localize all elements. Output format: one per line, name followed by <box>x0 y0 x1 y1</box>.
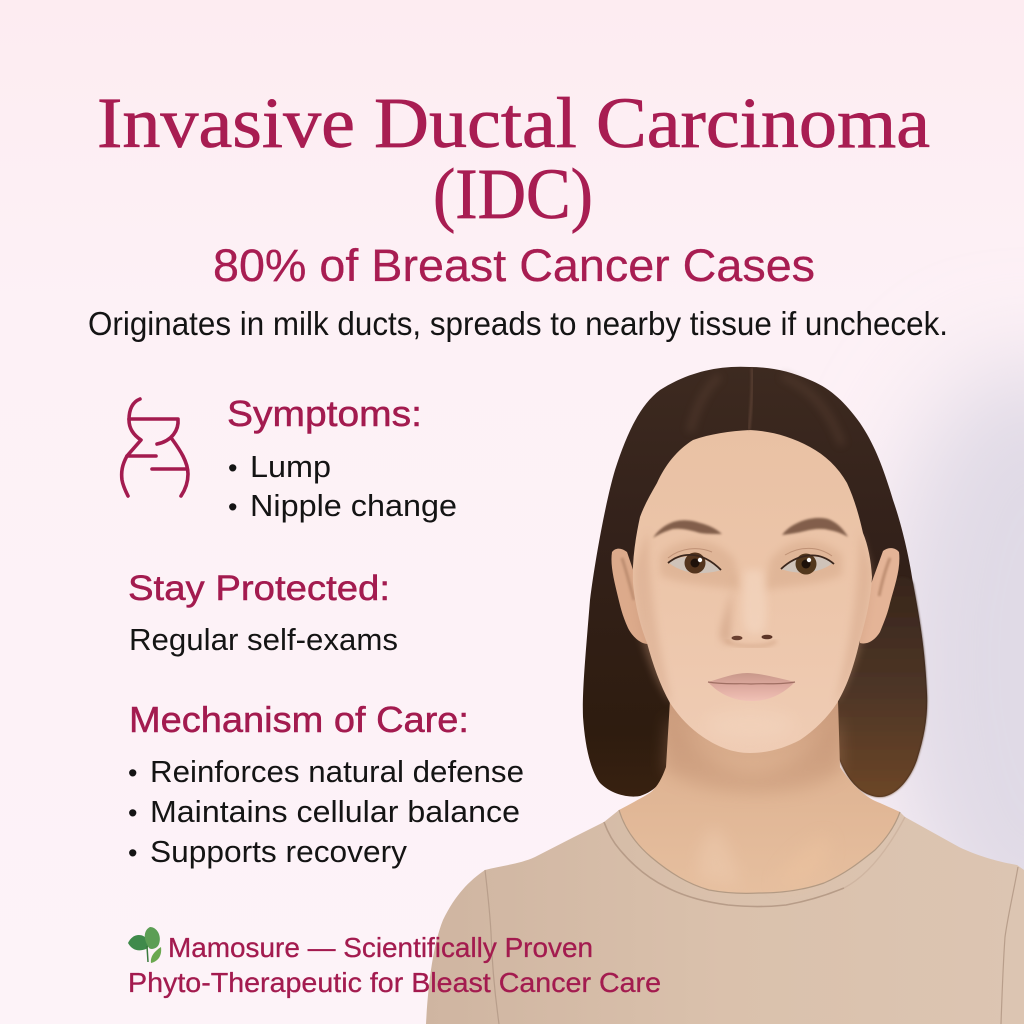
right eye <box>781 548 834 574</box>
eye socket shading <box>660 541 740 590</box>
mechanism of care section <box>128 699 524 869</box>
subtitle: 80% of Breast Cancer Cases <box>213 240 815 291</box>
chin highlight <box>705 709 795 741</box>
shirt collar line <box>604 822 844 906</box>
symptoms list <box>228 449 457 523</box>
footer text <box>128 932 661 998</box>
hair parting <box>749 368 752 430</box>
title: Invasive Ductal Carcinoma <box>97 83 930 163</box>
hair crown sheen <box>690 376 842 445</box>
neck collarbone highlights <box>698 825 740 885</box>
left eye <box>668 549 721 574</box>
symptoms heading: Symptoms: <box>227 393 422 434</box>
mechanism list: Supports recovery <box>150 834 408 869</box>
symptoms section <box>227 393 457 523</box>
description: Originates in milk ducts, spreads to nearby tissue if unchecek. <box>88 305 948 342</box>
footer text: Mamosure — Scientifically Proven <box>168 932 593 963</box>
mechanism heading: Mechanism of Care: <box>129 699 469 740</box>
icon: leaf <box>128 927 161 963</box>
neck <box>619 700 900 893</box>
right eyebrow <box>782 518 848 537</box>
shirt seams <box>485 867 1018 1024</box>
mechanism list: • <box>128 838 137 868</box>
nose <box>720 570 776 646</box>
symptoms list: Lump <box>250 449 331 484</box>
mechanism list: Maintains cellular balance <box>150 794 520 829</box>
mechanism list: Reinforces natural defense <box>150 754 524 789</box>
stay protected text: Regular self-exams <box>129 622 398 657</box>
right ear <box>858 548 899 643</box>
left eyebrow <box>653 520 722 538</box>
left ear <box>611 549 650 644</box>
mechanism list: • <box>128 798 137 828</box>
title <box>97 83 930 234</box>
hair right lighter lower part <box>835 577 927 797</box>
shirt <box>426 810 1024 1024</box>
symptoms list: • <box>228 453 237 483</box>
symptoms list: Nipple change <box>250 488 457 523</box>
title: (IDC) <box>433 154 593 234</box>
hair <box>583 367 927 797</box>
neck under-chin shadow <box>665 715 841 792</box>
stay protected section <box>128 569 398 657</box>
lips <box>708 673 795 701</box>
portrait photo of woman <box>426 367 1024 1024</box>
stay protected heading: Stay Protected: <box>128 569 390 608</box>
icon: torso <box>122 399 188 496</box>
collar inner edge <box>619 810 900 893</box>
face <box>633 430 872 753</box>
symptoms list: • <box>228 492 237 522</box>
mechanism list <box>128 754 524 869</box>
footer text: Phyto-Therapeutic for Bleast Cancer Care <box>128 967 661 998</box>
mechanism list: • <box>128 758 137 788</box>
face side shading <box>633 530 672 705</box>
